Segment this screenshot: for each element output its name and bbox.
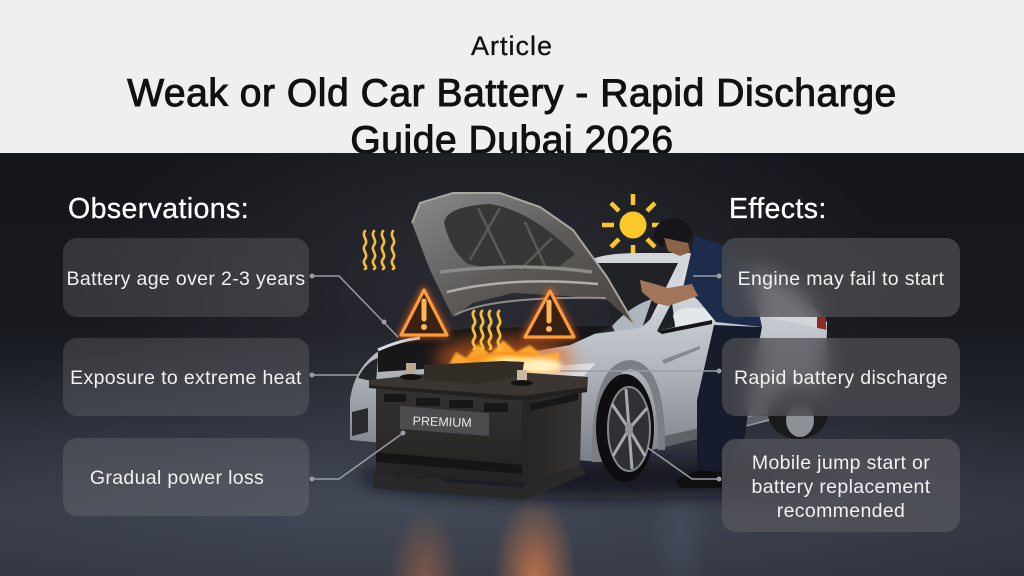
panel: jump start recommendation: Mobile jump start or	[752, 452, 930, 474]
headlight left	[358, 358, 378, 382]
panel: rapid discharge: Rapid battery discharge	[734, 366, 948, 388]
icon: sun	[602, 194, 664, 256]
panel: extreme heat	[63, 338, 309, 416]
fire glow behind battery	[435, 338, 575, 378]
battery side face	[522, 385, 582, 484]
side window	[657, 302, 675, 331]
icon: rising heat waves at engine	[473, 311, 500, 349]
header eyebrow: Article: Article	[471, 31, 553, 61]
car main body	[350, 262, 827, 462]
engine bay	[378, 326, 612, 372]
battery front face	[376, 388, 522, 484]
mechanic trousers	[697, 325, 762, 477]
mechanic arms	[640, 280, 698, 306]
title	[126, 72, 897, 162]
windshield	[592, 263, 678, 330]
headlight right	[548, 363, 596, 378]
battery terminals	[406, 363, 416, 377]
mechanic	[640, 218, 762, 488]
front wheel	[596, 374, 654, 482]
icon: heat waves left	[364, 231, 394, 269]
battery label plate	[400, 406, 489, 436]
side mirror	[673, 308, 714, 327]
car body	[350, 253, 828, 482]
panel: extreme heat: Exposure to extreme heat	[70, 366, 302, 388]
front bumper recess	[352, 408, 368, 436]
mechanic head	[653, 218, 693, 256]
car cabin and roof	[586, 253, 827, 345]
open hood	[412, 193, 635, 325]
connector lines	[310, 274, 722, 482]
panel: engine may fail	[722, 238, 960, 317]
battery brand text: PREMIUM	[412, 414, 472, 430]
title: Weak or Old Car Battery - Rapid Discharge	[127, 72, 897, 115]
floor shadow under car	[360, 458, 840, 498]
panel: battery age	[63, 238, 309, 317]
mechanic shirt	[683, 236, 762, 327]
panel: rapid discharge	[722, 338, 960, 416]
panel: engine may fail: Engine may fail to start	[738, 268, 944, 290]
battery top block	[424, 361, 524, 384]
panel: jump start recommendation: battery replacement	[752, 476, 930, 498]
battery front band	[376, 452, 522, 474]
icon: warning triangle right	[525, 291, 574, 337]
hood inner panel	[444, 204, 575, 270]
mechanic shoe	[677, 470, 722, 488]
panel: jump start recommendation: recommended	[777, 500, 905, 522]
dark illustration background	[0, 153, 1024, 576]
heading: Effects: Effects:	[729, 193, 827, 225]
icon: warning triangle left	[401, 290, 447, 335]
battery vents	[384, 393, 578, 412]
panel: jump start recommendation	[722, 439, 960, 532]
battery base	[373, 466, 586, 500]
sill	[660, 410, 780, 448]
panel: gradual power loss: Gradual power loss	[90, 467, 264, 489]
heading: Observations: Observations:	[68, 193, 249, 225]
rear wheel	[768, 387, 828, 439]
hood outer rim	[412, 193, 635, 325]
door shade	[662, 346, 700, 364]
title: Guide Dubai 2026	[350, 119, 674, 162]
battery lid	[369, 371, 588, 401]
tail light	[817, 316, 826, 330]
hood edge highlight left	[378, 338, 420, 350]
battery	[369, 361, 588, 500]
hood lower rib	[440, 267, 592, 272]
front wheel arch	[592, 360, 665, 462]
panel: gradual power loss	[63, 438, 309, 516]
panel: battery age: Battery age over 2-3 years	[67, 268, 305, 290]
